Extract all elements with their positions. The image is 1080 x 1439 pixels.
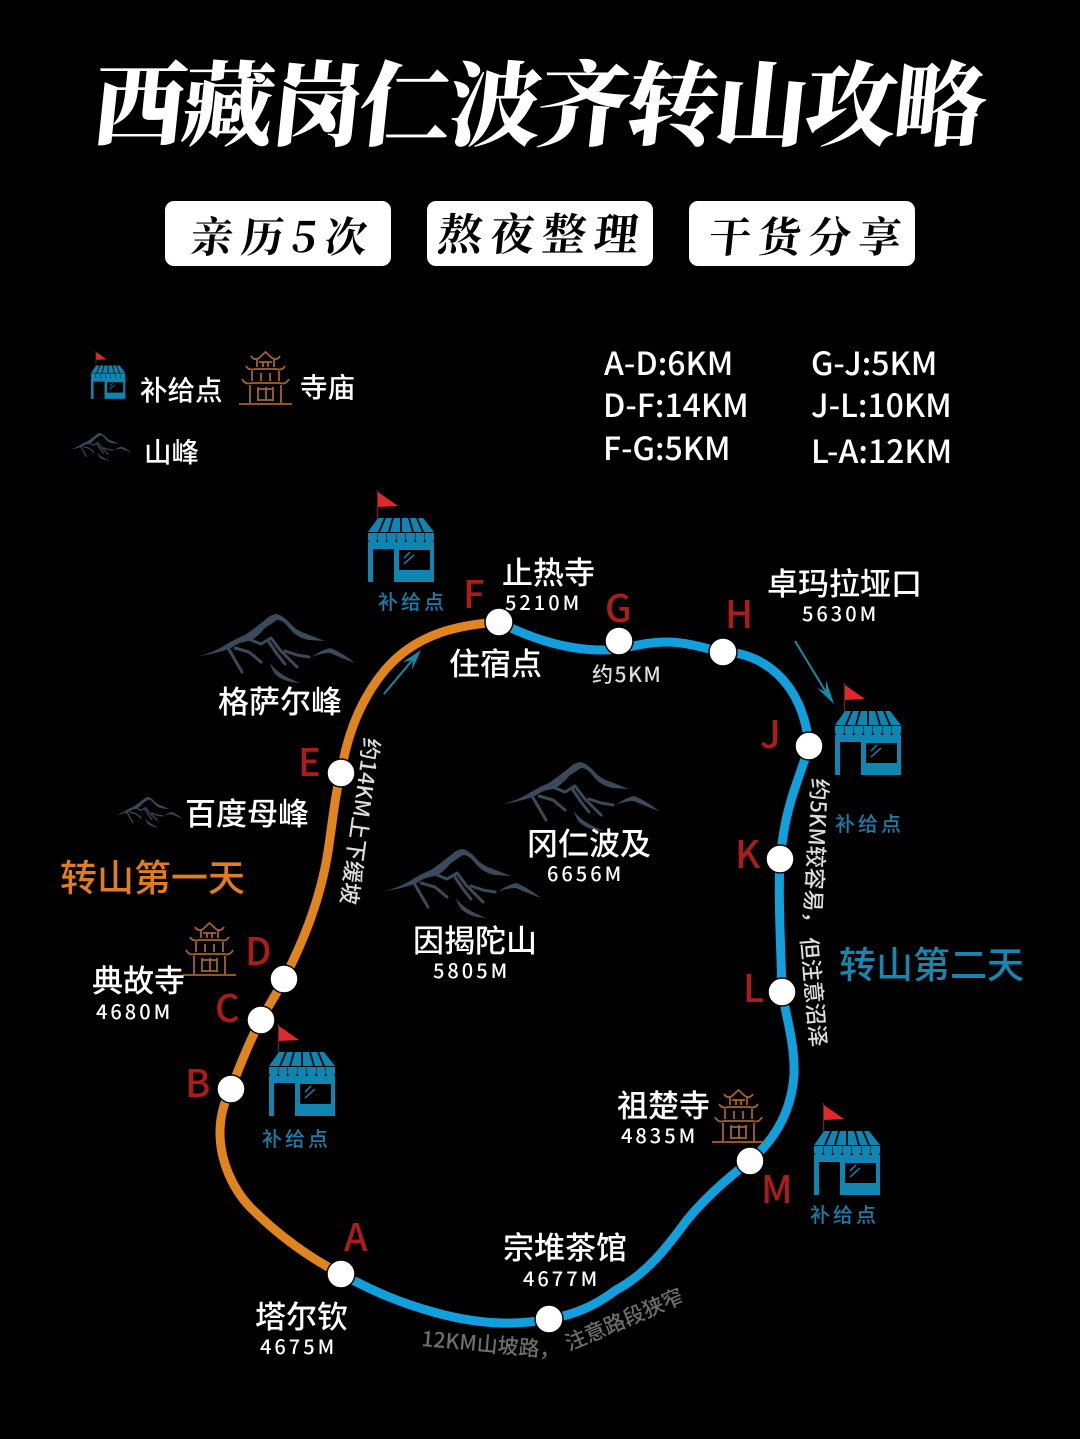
waypoint letters: D [245,921,272,976]
legend [69,351,355,470]
place: Zhuoma pass [767,559,922,627]
note: narrow road continued: 注意路段狭窄 [560,1281,688,1357]
distance table: J-L:10KM [811,381,952,427]
waypoint letters: C [215,978,240,1033]
distance table: G-J:5KM [811,339,937,385]
place: Zongdui teahouse: 宗堆茶馆 [503,1223,627,1268]
waypoint letters: F [463,564,485,619]
waypoint letters: B [185,1053,210,1108]
peak: Gesar [199,614,355,722]
tag: first-hand experience: 亲历5次 [188,205,370,265]
legend icon: temple [239,352,292,404]
arrow: to Zhuoma pass [795,641,834,704]
waypoint letters: G [605,578,632,633]
place: Zhire temple: 止热寺 [502,548,595,593]
peak: Baidumu: 百度母峰 [185,789,309,834]
distance table: D-F:14KM [603,381,749,427]
note: D-F slope: 约14KM上下缓坡 [334,736,389,907]
peak: Kailash: 冈仁波及 [527,819,651,864]
peak: Kailash: 6656M [547,858,624,887]
place: Zhuoma pass: 卓玛拉垭口 [767,559,922,604]
legend label: supply point: 补给点 [140,368,222,408]
distance table [603,339,952,473]
tag: useful sharing: 干货分享 [706,205,904,265]
waypoint letters: M [761,1159,793,1214]
temple: Diangu: 4680M [96,996,173,1025]
place: Tarchen: 塔尔钦 [255,1292,348,1337]
temple: Zuchu [617,1081,765,1149]
supply point: near F: 补给点 [378,586,447,615]
temple: Zuchu: 祖楚寺 [617,1081,710,1126]
waypoint letters: H [725,584,753,639]
supply point: near M [810,1103,880,1228]
supply point: near M: 补给点 [810,1199,879,1228]
supply point: near C: 补给点 [262,1123,331,1152]
place: lodging: 住宿点 [449,639,542,684]
legend label: temple: 寺庙 [300,365,355,405]
legend icon: supply point [91,351,125,399]
note: marsh caution: 但注意沼泽 [794,936,835,1048]
place: Zhire temple: 5210M [505,587,582,616]
waypoint letters: J [760,704,781,759]
supply point: near F [368,490,447,615]
waypoint letters: K [735,824,761,879]
note: narrow road: 12KM山坡路， [420,1323,562,1365]
distance table: F-G:5KM [603,424,731,470]
day two label: 转山第二天 [839,935,1024,989]
temple: Diangu: 典故寺 [92,956,185,1001]
distance table: L-A:12KM [811,427,952,473]
legend icon: peak [69,433,131,461]
distance table: A-D:6KM [604,339,733,385]
supply point: near C [262,1024,335,1152]
peak: Yinjietuo: 5805M [433,955,510,984]
peak: Yinjietuo: 因揭陀山 [413,916,537,961]
temple: Zuchu: 4835M [621,1120,698,1149]
peak: Kailash [503,762,659,887]
route: day one (orange) [220,622,499,1274]
tag: late night compiled: 熬夜整理 [435,199,642,263]
place: Tarchen: 4675M [260,1331,337,1360]
day one label: 转山第一天 [60,848,245,902]
legend label: peak: 山峰 [144,430,199,470]
route waypoints [217,608,823,1333]
waypoint letters [185,564,793,1262]
peak: Baidumu [114,789,309,834]
place: Zongdui teahouse [503,1223,627,1292]
note: F-G distance: 约5KM [592,659,662,689]
waypoint letters: L [743,958,764,1013]
temple: Diangu [92,923,236,1025]
note: J-L easy: 约5KM较容易， [797,778,837,935]
waypoint letters: E [298,732,321,787]
place: Tarchen [255,1292,348,1360]
arrow: direction up slope [384,650,421,694]
place: Zongdui teahouse: 4677M [523,1263,600,1292]
waypoint letters: A [344,1207,368,1262]
title: 西藏岗仁波齐转山攻略 [88,33,994,165]
place: Zhuoma pass: 5630M [802,598,879,627]
place: Zhire temple [502,548,595,616]
peak: Gesar: 格萨尔峰 [218,677,342,722]
route: day two (blue) [341,622,809,1323]
peak: Yinjietuo [385,849,541,984]
supply point: near J: 补给点 [835,808,904,837]
supply point: near J [835,683,904,837]
